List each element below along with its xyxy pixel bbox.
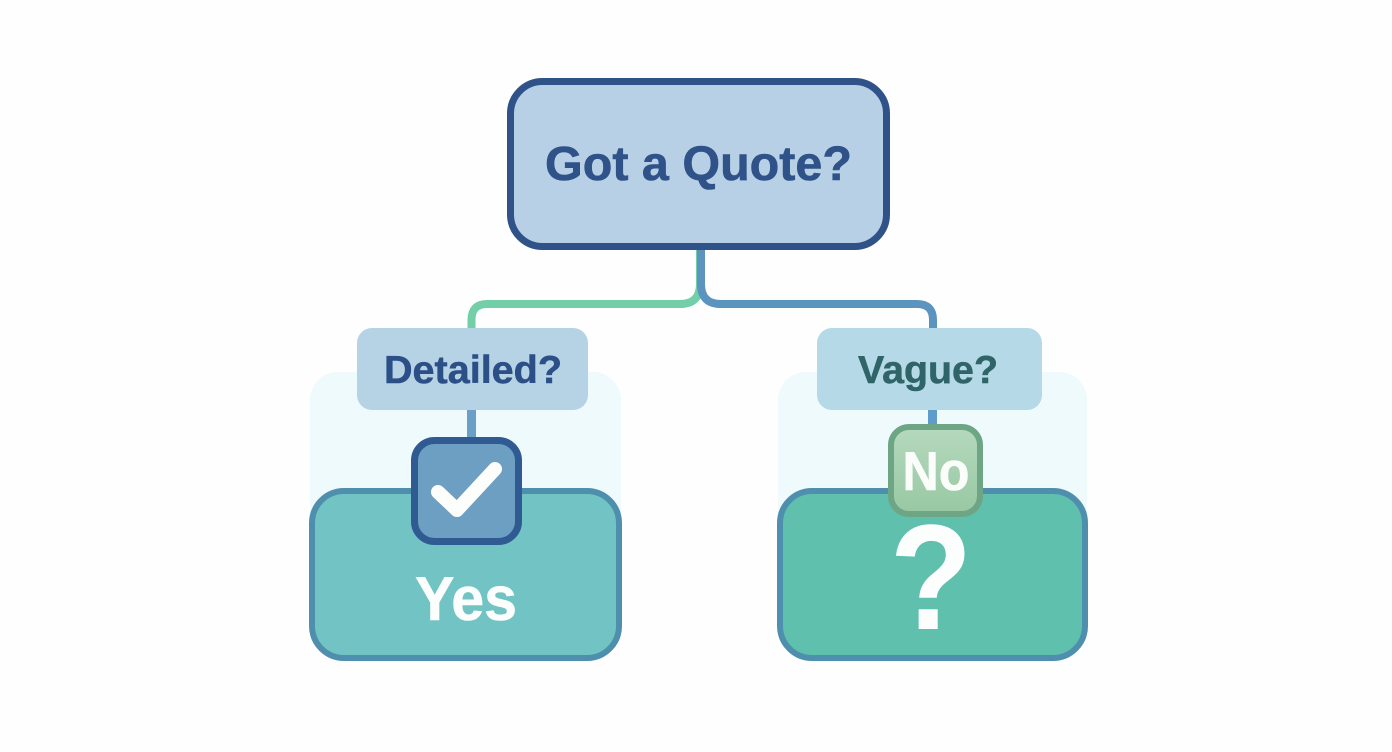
connector: Detailed to check (467, 408, 476, 440)
background panel: detailed branch (310, 372, 621, 552)
connector: stem to No branch (701, 248, 933, 330)
outcome: question mark (780, 491, 1085, 662)
badge: No: No (902, 440, 970, 502)
connector: Vague to No (928, 408, 937, 428)
outcome: Yes: Yes (415, 565, 517, 634)
badge: No (891, 427, 980, 514)
question: Detailed? (357, 328, 588, 410)
background panel: vague branch (778, 372, 1087, 552)
outcome: Yes (312, 491, 619, 658)
node: Got a Quote? (510, 82, 886, 246)
connector: stem to Yes branch (472, 248, 700, 330)
question: Vague? (817, 328, 1042, 410)
icon: check badge (414, 440, 518, 542)
node: Got a Quote?: Got a Quote? (545, 138, 852, 191)
question: Vague?: Vague? (858, 349, 998, 392)
question: Detailed?: Detailed? (384, 349, 562, 392)
outcome: question mark: ? (890, 494, 972, 662)
